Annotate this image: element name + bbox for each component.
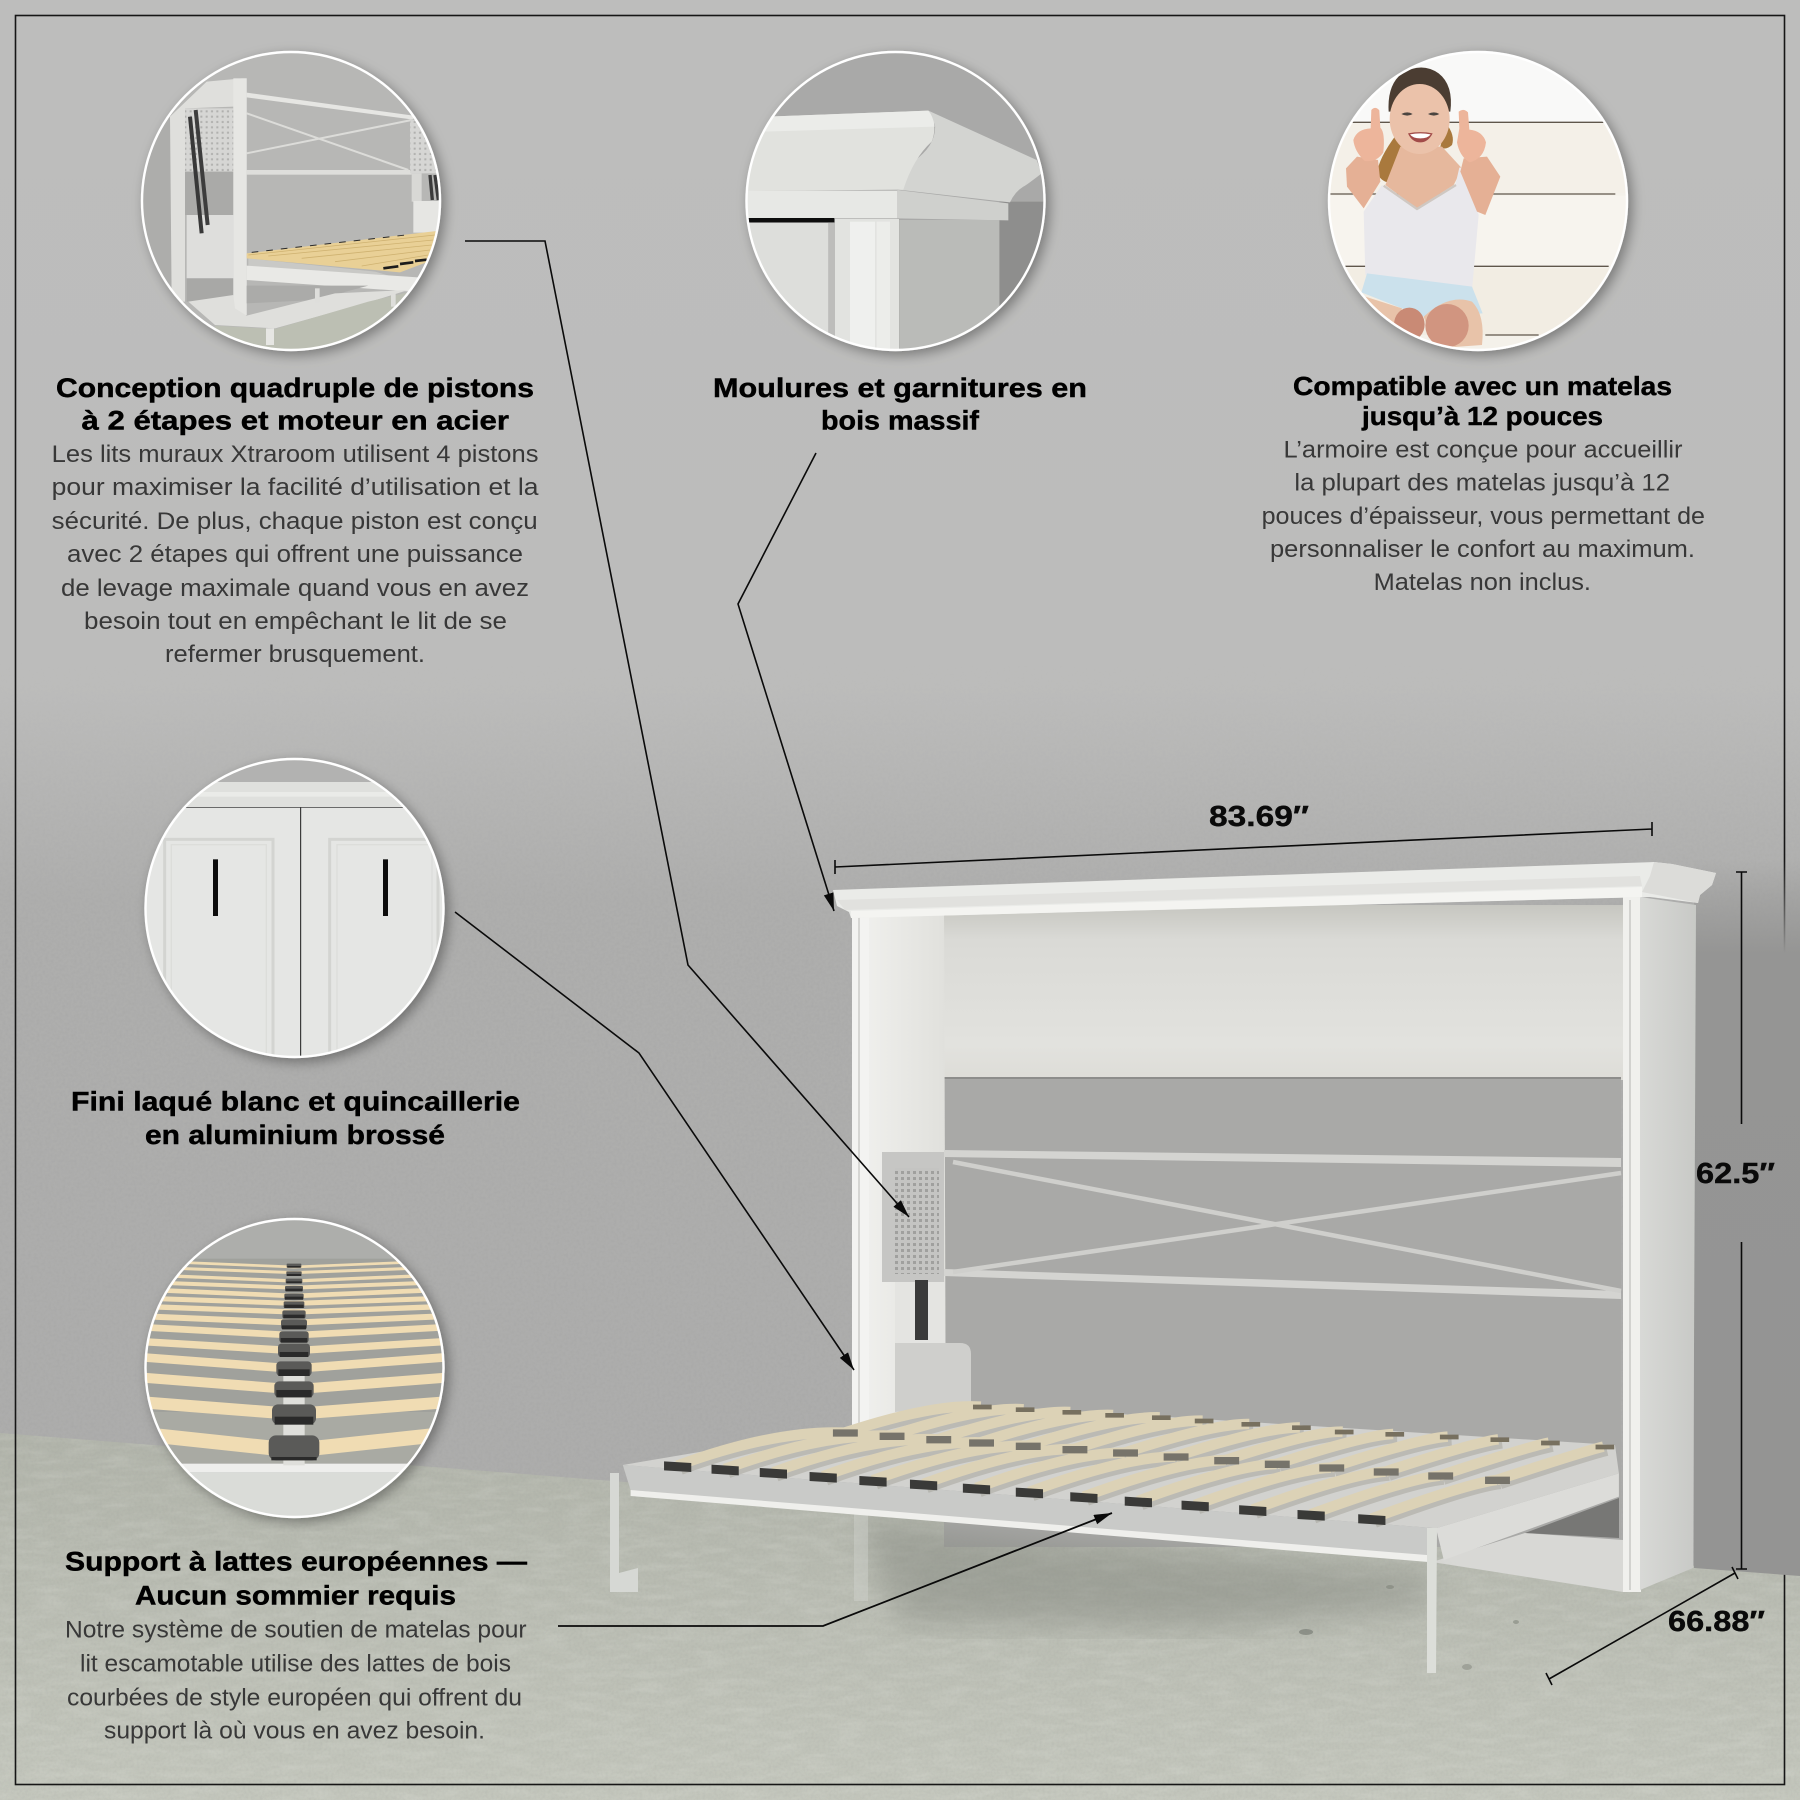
- callout: finish: [455, 912, 854, 1370]
- right pilaster and side: [1623, 897, 1641, 1592]
- slat shadows: [681, 1411, 1607, 1523]
- heading: mattress: Compatible avec un matelas: [1293, 371, 1672, 401]
- circle photo: piston mechanism: [135, 45, 447, 357]
- cabinet back panel: [868, 905, 1624, 1080]
- callout: moldings: [738, 453, 834, 911]
- body: pistons: de levage maximale quand vous en avez: [61, 575, 529, 602]
- perforated side plate: [882, 1152, 944, 1282]
- heading: pistons: à 2 étapes et moteur en acier: [82, 406, 510, 436]
- body: pistons: pour maximiser la facilité d’utilisation et la: [52, 474, 539, 501]
- circle photo: white doors: [138, 752, 450, 1064]
- body: mattress: la plupart des matelas jusqu’à 12: [1294, 470, 1670, 496]
- heading: moldings: [713, 373, 1087, 436]
- body: pistons: sécurité. De plus, chaque piston est conçu: [52, 508, 538, 535]
- left inner side: [868, 908, 946, 1480]
- background wall and floor: [0, 772, 1800, 1800]
- middle rail caps: [833, 1429, 1510, 1484]
- back slat row: [845, 1406, 1603, 1480]
- piston and lower bracket: [895, 1280, 971, 1412]
- callout: slats: [558, 1513, 1112, 1626]
- heading: finish: Fini laqué blanc et quincaillerie: [71, 1086, 520, 1116]
- body: pistons: Les lits muraux Xtraroom utilisent 4 pistons: [52, 441, 538, 468]
- body: mattress: [1262, 436, 1705, 596]
- dimension labels: [1209, 801, 1775, 1638]
- bed platform: [623, 1405, 1619, 1562]
- bed fascia: [623, 1465, 1436, 1562]
- body: pistons: [52, 441, 539, 668]
- callout: pistons: [465, 241, 909, 1217]
- front right leg: [1427, 1528, 1437, 1673]
- heading: finish: en aluminium brossé: [145, 1120, 445, 1150]
- front slat end caps: [664, 1461, 1385, 1525]
- body: mattress: L’armoire est conçue pour accueillir: [1284, 436, 1683, 464]
- back slat end caps: [973, 1405, 1614, 1449]
- label: depth: 66.88″: [1668, 1606, 1765, 1638]
- woman top: [1364, 168, 1479, 290]
- metal bed frame: [944, 1150, 1621, 1299]
- heading: pistons: [56, 373, 534, 436]
- label: height: 62.5″: [1696, 1158, 1775, 1190]
- body: mattress: pouces d’épaisseur, vous permettant de: [1262, 503, 1705, 530]
- body: mattress: Matelas non inclus.: [1374, 569, 1591, 596]
- body: slats: [65, 1616, 527, 1744]
- heading: moldings: bois massif: [821, 406, 980, 436]
- woman hair: [1388, 67, 1451, 112]
- cabinet shadow on wall: [1694, 860, 1800, 1576]
- text block: mattress: [1262, 371, 1705, 596]
- heading: pistons: Conception quadruple de pistons: [56, 373, 534, 403]
- right plinth: [1432, 1533, 1623, 1592]
- crown molding: [833, 862, 1716, 918]
- heading: mattress: jusqu’à 12 pouces: [1361, 401, 1603, 431]
- wall bed cabinet: [610, 860, 1800, 1673]
- body: slats: support là où vous en avez besoin.: [104, 1718, 485, 1744]
- body: slats: Notre système de soutien de matelas pour: [65, 1616, 527, 1644]
- body: slats: lit escamotable utilise des lattes de bois: [80, 1650, 511, 1678]
- body: mattress: personnaliser le confort au maximum.: [1270, 536, 1695, 563]
- woman chest: [1385, 147, 1462, 208]
- width dimension: [835, 822, 1652, 874]
- bed top surface: [623, 1405, 1619, 1528]
- dimension lines: [835, 822, 1747, 1685]
- heading: slats: [65, 1546, 527, 1610]
- circle photo: euro slats: [138, 1212, 450, 1524]
- text block: slats: [65, 1546, 527, 1744]
- body: pistons: avec 2 étapes qui offrent une puissance: [67, 541, 523, 568]
- circle photo: crown molding: [740, 45, 1052, 357]
- callout lines with arrows: [455, 241, 1112, 1626]
- woman arms: [1346, 157, 1380, 208]
- heading: moldings: Moulures et garnitures en: [713, 373, 1087, 403]
- heading: mattress: [1293, 371, 1672, 431]
- wall opening: [944, 1077, 1621, 1547]
- depth dimension: [1546, 1567, 1738, 1685]
- woman thumbs up: [1353, 108, 1384, 161]
- heading: finish: [71, 1086, 520, 1150]
- floor shadow under bed: [860, 1520, 1430, 1628]
- label: width: 83.69″: [1209, 801, 1309, 833]
- text block: pistons: [52, 373, 539, 668]
- heading: slats: Support à lattes européennes —: [65, 1546, 527, 1576]
- back left leg: [854, 1513, 868, 1601]
- body: slats: courbées de style européen qui offrent du: [67, 1684, 522, 1712]
- woman face: [1390, 84, 1450, 154]
- heading: slats: Aucun sommier requis: [135, 1580, 456, 1610]
- front left leg: [610, 1473, 638, 1592]
- front slat row: [677, 1432, 1497, 1519]
- woman legs and feet: [1366, 296, 1402, 323]
- body: pistons: refermer brusquement.: [165, 641, 425, 668]
- left pilaster: [852, 915, 869, 1425]
- body: pistons: besoin tout en empêchant le lit de se: [84, 608, 507, 635]
- height dimension: [1736, 872, 1747, 1569]
- woman shorts: [1361, 273, 1483, 317]
- circle photo: woman on mattress: [1322, 45, 1634, 357]
